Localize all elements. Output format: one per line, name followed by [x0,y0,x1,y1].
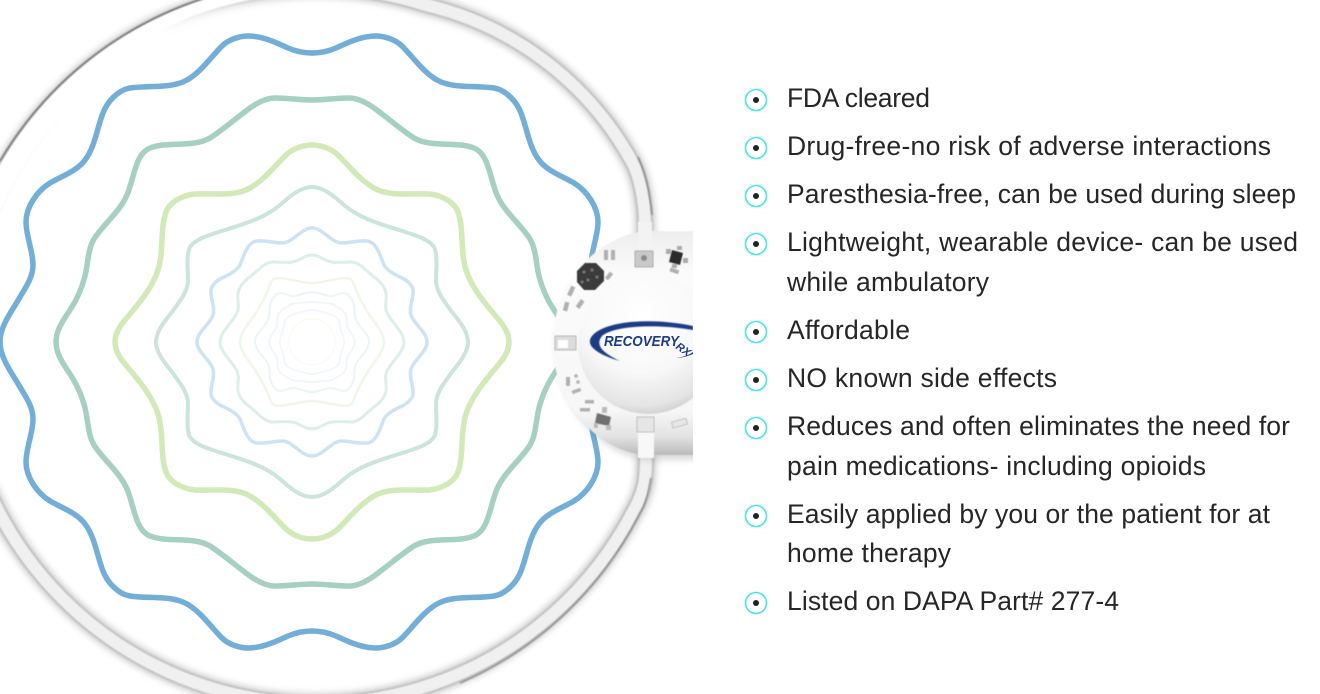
device shadow [567,402,693,462]
bottom left component [594,407,611,430]
item: easily applied: home therapy [787,538,952,568]
item: DAPA: Listed on DAPA Part# 277-4 [787,586,1119,616]
item: drug-free: Drug-free-no risk of adverse interactions [787,131,1271,161]
wave ring 1 [0,36,624,648]
item: FDA cleared: FDA cleared [787,83,930,113]
bullet: drug-free [746,138,766,158]
item: lightweight: while ambulatory [786,267,990,297]
wave ring 9 [269,302,355,382]
innermost circle [289,319,335,365]
cable ring around the waves [0,0,652,694]
small surface components [563,250,688,428]
wave ring 6 [220,255,404,429]
item: paresthesia-free: Paresthesia-free, can be used during sleep [787,179,1296,209]
wave ring 3 [115,145,509,539]
wave ring 5 [197,228,427,456]
item: affordable: Affordable [787,315,910,345]
item: reduces medications [787,411,1290,481]
wave ring 8 [255,292,369,392]
wave ring 7 [240,278,384,406]
item: easily applied [787,499,1271,568]
logo lower swoosh [676,352,693,358]
item: lightweight: Lightweight, wearable device- can be used [787,227,1298,257]
bullet: paresthesia-free [746,186,766,206]
item: reduces medications: Reduces and often eliminates the need for [787,411,1290,441]
wave ring 10 [280,310,344,374]
logo rx mark: RX [673,341,693,360]
circuit chip [577,263,604,290]
bullet: DAPA [746,592,766,614]
item: lightweight [786,227,1298,297]
top connector [635,251,653,267]
logo word: RECOVERY [604,333,681,350]
top right chip [666,246,688,268]
benefits list [746,83,1298,616]
wave ring 2 [56,98,568,586]
bullet: reduces medications [746,418,766,438]
bullet: affordable [746,322,766,342]
item: reduces medications: pain medications- including opioids [787,451,1206,481]
top cable into device [638,222,652,232]
item: side effects: NO known side effects [787,363,1057,393]
wave ring 4 [156,187,468,497]
concentric wave rings [0,36,624,648]
bottom connector [637,417,654,432]
device dome [580,350,693,414]
bullet: FDA cleared [746,90,766,110]
item: easily applied: Easily applied by you or the patient for at [787,499,1271,529]
RecoveryRx device [554,222,693,462]
bottom cable into device [638,430,654,458]
left connector [555,336,576,350]
bullet: lightweight [746,234,766,254]
bullet: side effects [746,370,766,390]
device body [553,231,700,455]
logo swoosh [590,321,693,361]
bullet: easily applied [746,506,766,526]
